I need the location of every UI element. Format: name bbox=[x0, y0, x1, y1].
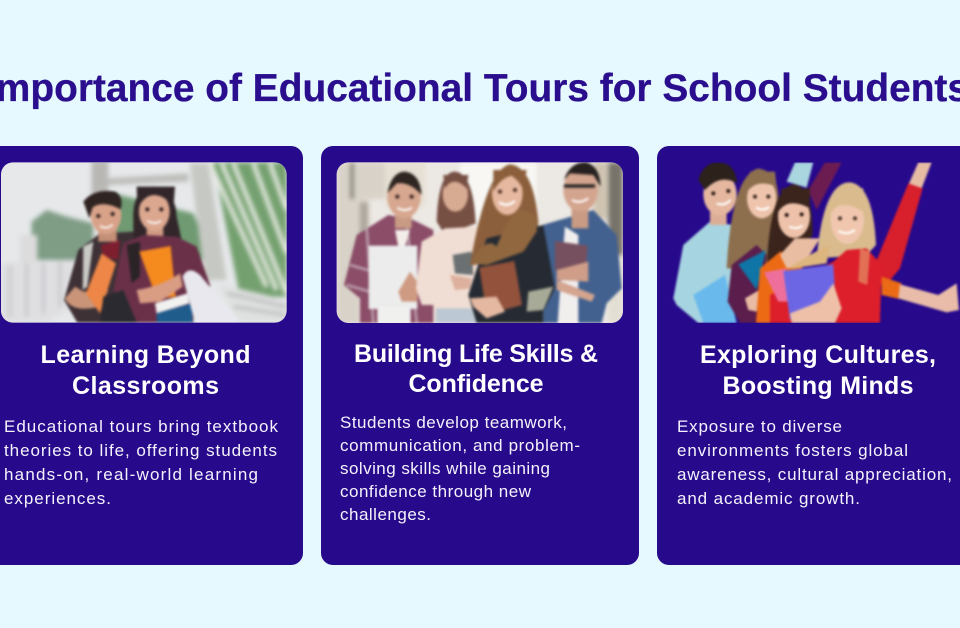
student 2 bbox=[437, 172, 476, 235]
body text: solving skills while gaining bbox=[340, 459, 550, 478]
raised arms bbox=[787, 162, 813, 188]
photo: cheering students bbox=[673, 162, 959, 323]
body text: awareness, cultural appreciation, bbox=[677, 465, 952, 484]
student 4 bbox=[817, 182, 876, 258]
notebooks bbox=[764, 268, 788, 302]
body text bbox=[340, 413, 580, 524]
student 1 bbox=[673, 222, 740, 323]
panel: exploring cultures: Boosting Minds bbox=[722, 372, 914, 400]
student 3 bbox=[470, 164, 538, 265]
body text: environments fosters global bbox=[677, 441, 908, 460]
body text bbox=[677, 417, 952, 508]
student 3 bbox=[767, 184, 813, 268]
girl bbox=[132, 196, 182, 240]
body text: confidence through new bbox=[340, 482, 532, 501]
body text: experiences. bbox=[4, 489, 111, 508]
panel: exploring cultures bbox=[657, 146, 960, 565]
student 4 bbox=[543, 210, 622, 323]
body text bbox=[4, 417, 278, 508]
student 1 bbox=[344, 215, 433, 323]
body text: Students develop teamwork, bbox=[340, 413, 567, 432]
body text: challenges. bbox=[340, 505, 431, 524]
heading: Exploring Cultures, bbox=[700, 341, 936, 369]
title: Importance of Educational Tours for School Students bbox=[0, 67, 960, 110]
photo: four students holding books bbox=[336, 162, 623, 323]
student 2 bbox=[727, 168, 778, 268]
body text: hands-on, real-world learning bbox=[4, 465, 258, 484]
panel: building life skills bbox=[321, 146, 639, 565]
panel: learning beyond classrooms bbox=[0, 146, 303, 565]
boy bbox=[64, 232, 140, 323]
body text: Educational tours bring textbook bbox=[4, 417, 278, 436]
body text: and academic growth. bbox=[677, 489, 860, 508]
panel: building life skills: Confidence bbox=[408, 370, 544, 398]
body text: theories to life, offering students bbox=[4, 441, 277, 460]
photo: two students on a bridge bbox=[0, 160, 290, 327]
heading: Building Life Skills & bbox=[354, 340, 598, 368]
body text: Exposure to diverse bbox=[677, 417, 842, 436]
panel: learning beyond classrooms: Classrooms bbox=[72, 372, 219, 400]
body text: communication, and problem- bbox=[340, 436, 580, 455]
heading: Learning Beyond bbox=[40, 341, 250, 369]
